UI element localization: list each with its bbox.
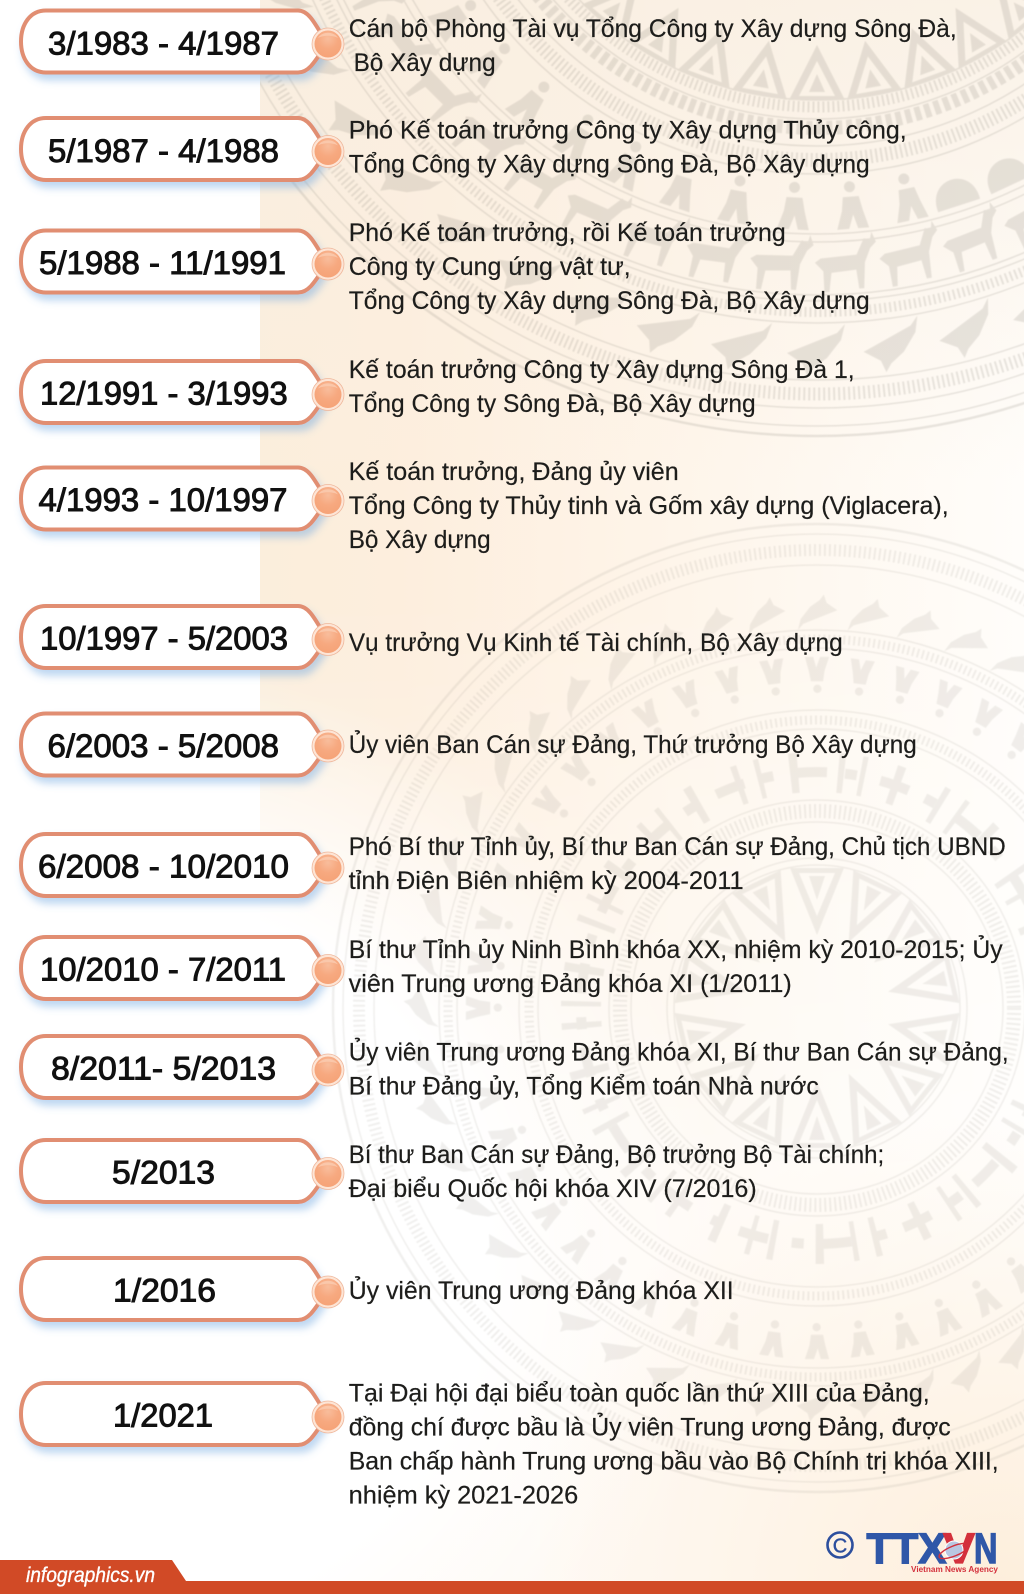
connector dot xyxy=(312,1276,344,1308)
timeline entry: 8/2011 - 5/2013 xyxy=(21,1036,1009,1100)
timeline entry: 5/1988 - 11/1991 xyxy=(21,219,870,315)
description: Tổng Công ty Thủy tinh và Gốm xây dựng (Viglacera), xyxy=(349,492,949,520)
date pill: 6/2008 - 10/2010 xyxy=(38,848,289,884)
date pill xyxy=(21,118,327,180)
timeline entry: 4/1993 - 10/1997 xyxy=(21,458,949,554)
copyright symbol xyxy=(828,1532,852,1558)
date pill xyxy=(21,834,327,896)
date pill: 5/1988 - 11/1991 xyxy=(39,245,286,281)
description xyxy=(349,458,949,554)
description: Ủy viên Ban Cán sự Đảng, Thứ trưởng Bộ Xây dựng xyxy=(349,729,917,759)
description: Tổng Công ty Xây dựng Sông Đà, Bộ Xây dựng xyxy=(349,150,870,178)
description xyxy=(349,1141,884,1203)
logo: TTXVN Vietnam News Agency: TTX xyxy=(866,1525,947,1573)
timeline entry: 5/1987 - 4/1988 xyxy=(21,116,907,180)
timeline entry: 6/2008 - 10/2010 xyxy=(21,833,1006,896)
description: đồng chí được bầu là Ủy viên Trung ương Đảng, được xyxy=(349,1412,951,1442)
description xyxy=(349,934,1003,998)
background: upper bronze drum pattern xyxy=(260,0,1024,438)
description: Bộ Xây dựng xyxy=(354,49,496,77)
description: Tại Đại hội đại biểu toàn quốc lần thứ XIII của Đảng, xyxy=(349,1380,930,1408)
timeline entry: 1/2016 xyxy=(21,1258,734,1320)
logo: TTXVN Vietnam News Agency: V xyxy=(943,1525,975,1573)
logo: TTXVN Vietnam News Agency xyxy=(866,1525,998,1574)
timeline entry: 3/1983 - 4/1987 xyxy=(21,10,957,77)
description: tỉnh Điện Biên nhiệm kỳ 2004-2011 xyxy=(349,867,744,895)
description: Bí thư Tỉnh ủy Ninh Bình khóa XX, nhiệm kỳ 2010-2015; Ủy xyxy=(349,934,1003,964)
description: Phó Kế toán trưởng, rồi Kế toán trưởng xyxy=(349,219,786,247)
description xyxy=(349,1036,1009,1100)
connector dot xyxy=(312,730,344,762)
date pill: 1/2021 xyxy=(113,1398,213,1434)
connector dot xyxy=(312,954,344,986)
description: Kế toán trưởng, Đảng ủy viên xyxy=(349,458,679,486)
date pill: 6/2003 - 5/2008 xyxy=(48,728,279,764)
description: viên Trung ương Đảng khóa XI (1/2011) xyxy=(349,970,792,998)
timeline entry: 6/2003 - 5/2008 xyxy=(21,714,917,776)
description: Bí thư Ban Cán sự Đảng, Bộ trưởng Bộ Tài chính; xyxy=(349,1141,884,1169)
date pill: 5/1987 - 4/1988 xyxy=(48,133,279,169)
footer source text: infographics.vn xyxy=(26,1564,155,1587)
copyright symbol: C xyxy=(833,1536,847,1558)
description xyxy=(349,356,855,418)
description xyxy=(349,116,907,178)
description: Phó Bí thư Tỉnh ủy, Bí thư Ban Cán sự Đảng, Chủ tịch UBND xyxy=(349,833,1006,861)
description: Tổng Công ty Sông Đà, Bộ Xây dựng xyxy=(349,390,756,418)
description xyxy=(349,833,1006,895)
date pill xyxy=(21,1383,327,1445)
date pill xyxy=(21,606,327,668)
date pill: 10/2010 - 7/2011 xyxy=(40,952,286,988)
date pill xyxy=(21,230,327,292)
logo: TTXVN Vietnam News Agency: N xyxy=(974,1525,998,1573)
date pill: 1/2016 xyxy=(113,1272,216,1308)
date pill: 10/1997 - 5/2003 xyxy=(40,620,288,656)
connector dot xyxy=(312,248,344,280)
description: Ban chấp hành Trung ương bầu vào Bộ Chính trị khóa XIII, xyxy=(349,1448,999,1476)
connector dot xyxy=(312,1401,344,1433)
footer band with source tab xyxy=(0,1560,1024,1594)
background: lower bronze drum pattern xyxy=(333,524,1024,1492)
timeline entry: 12/1991 - 3/1993 xyxy=(21,356,855,423)
timeline entry: 10/2010 - 7/2011 xyxy=(21,934,1003,999)
description: Phó Kế toán trưởng Công ty Xây dựng Thủy công, xyxy=(349,116,907,144)
date pill xyxy=(21,10,327,72)
date pill xyxy=(21,937,327,999)
connector dot xyxy=(312,624,344,656)
timeline entry: 5/2013 xyxy=(21,1140,884,1203)
connector dot xyxy=(312,1054,344,1086)
description: Bộ Xây dựng xyxy=(349,526,491,554)
description: Ủy viên Trung ương Đảng khóa XI, Bí thư Ban Cán sự Đảng, xyxy=(349,1036,1009,1066)
description: Công ty Cung ứng vật tư, xyxy=(349,253,631,281)
description: Kế toán trưởng Công ty Xây dựng Sông Đà 1, xyxy=(349,356,855,384)
timeline entry: 10/1997 - 5/2003 xyxy=(21,606,843,668)
connector dot xyxy=(312,28,344,60)
description: Đại biểu Quốc hội khóa XIV (7/2016) xyxy=(349,1175,757,1203)
description: Tổng Công ty Xây dựng Sông Đà, Bộ Xây dựng xyxy=(349,287,870,315)
date pill xyxy=(21,468,327,530)
date pill xyxy=(21,1140,327,1202)
description: Vụ trưởng Vụ Kinh tế Tài chính, Bộ Xây dựng xyxy=(349,629,843,657)
description: nhiệm kỳ 2021-2026 xyxy=(349,1482,578,1510)
background: peach gradient panel xyxy=(260,0,1024,1581)
description: Cán bộ Phòng Tài vụ Tổng Công ty Xây dựng Sông Đà, xyxy=(349,15,957,43)
connector dot xyxy=(312,484,344,516)
date pill: 4/1993 - 10/1997 xyxy=(38,482,288,518)
date pill: 5/2013 xyxy=(112,1154,215,1190)
date pill xyxy=(21,1258,327,1320)
connector dot xyxy=(312,378,344,410)
date pill: 3/1983 - 4/1987 xyxy=(48,26,279,62)
description: Bí thư Đảng ủy, Tổng Kiểm toán Nhà nước xyxy=(349,1072,819,1100)
date pill xyxy=(21,714,327,776)
description xyxy=(349,15,957,77)
date pill xyxy=(21,361,327,423)
date pill xyxy=(21,1036,327,1098)
date pill: 8/2011- 5/2013 xyxy=(51,1050,276,1086)
description: Ủy viên Trung ương Đảng khóa XII xyxy=(349,1275,734,1305)
logo: TTXVN Vietnam News Agency: Vietnam News Agency xyxy=(911,1564,998,1574)
date pill: 12/1991 - 3/1993 xyxy=(40,376,288,412)
timeline entry: 1/2021 xyxy=(21,1380,999,1510)
description xyxy=(349,1380,999,1510)
connector dot xyxy=(312,1158,344,1190)
connector dot xyxy=(312,852,344,884)
connector dot xyxy=(312,136,344,168)
description xyxy=(349,219,870,315)
